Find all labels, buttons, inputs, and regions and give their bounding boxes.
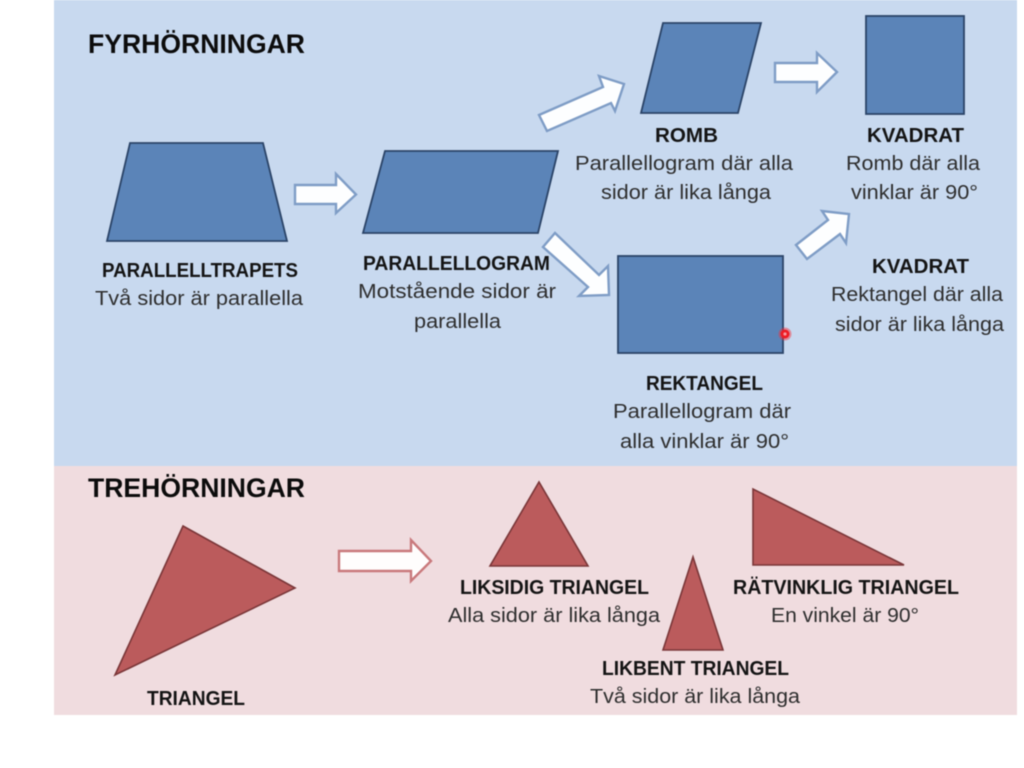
panel: trehörningar [54, 466, 1017, 715]
text: liksidig triangel [448, 577, 661, 627]
arrow: romb to kvadrat [775, 53, 837, 92]
text: kvadrat från rektangel: Rektangel där alla [831, 283, 1004, 306]
arrow: parallelltrapets to parallellogram [295, 174, 356, 213]
text: rektangel: REKTANGEL [646, 373, 763, 395]
text: kvadrat från romb [846, 125, 981, 204]
text: kvadrat från romb: vinklar är 90° [851, 181, 978, 204]
shape: rätvinklig triangel [753, 489, 904, 565]
text: kvadrat från rektangel [831, 256, 1005, 336]
text: kvadrat från romb: Romb där alla [846, 152, 981, 175]
text: romb: ROMB [655, 125, 718, 147]
text: liksidig triangel: Alla sidor är lika långa [448, 604, 661, 627]
text: rätvinklig triangel [733, 576, 959, 627]
shape: parallellogram [363, 151, 558, 233]
text: romb: Parallellogram där alla [575, 152, 794, 175]
arrow: parallellogram to romb [539, 76, 624, 131]
text: romb [575, 125, 794, 204]
cursor dot [778, 328, 792, 340]
arrow: rektangel to kvadrat [796, 211, 849, 259]
text: romb: sidor är lika långa [601, 181, 772, 204]
text: parallelltrapets [95, 260, 304, 310]
text: parallellogram: parallella [414, 310, 502, 333]
text: parallellogram: Motstående sidor är [358, 280, 556, 303]
text: rektangel: alla vinklar är 90° [620, 430, 789, 453]
text: liksidig triangel: LIKSIDIG TRIANGEL [460, 577, 649, 599]
text: rektangel [613, 373, 791, 453]
heading: fyrhörningar: FYRHÖRNINGAR [88, 29, 305, 59]
shape: likbent triangel [663, 557, 723, 650]
text: parallellogram [358, 253, 556, 333]
shape: parallelltrapets [107, 143, 287, 241]
text: rektangel: Parallellogram där [613, 400, 791, 423]
shape: triangel [115, 526, 295, 675]
arrow: triangel to typer [339, 540, 431, 581]
shape: kvadrat [866, 16, 964, 114]
shape: romb [641, 23, 761, 113]
panel: fyrhörningar [54, 0, 1017, 466]
text: rätvinklig triangel: En vinkel är 90° [771, 604, 919, 627]
text: kvadrat från rektangel: sidor är lika långa [835, 313, 1005, 336]
arrow: parallellogram to rektangel [543, 233, 609, 296]
shape: liksidig triangel [490, 482, 588, 566]
text: likbent triangel [590, 658, 801, 708]
shape: rektangel [618, 256, 783, 353]
text: parallellogram: PARALLELLOGRAM [363, 253, 550, 275]
text: kvadrat från romb: KVADRAT [867, 125, 964, 147]
text: parallelltrapets: PARALLELLTRAPETS [102, 260, 298, 282]
text: kvadrat från rektangel: KVADRAT [872, 256, 969, 278]
heading: trehörningar: TREHÖRNINGAR [88, 473, 305, 503]
text: likbent triangel: LIKBENT TRIANGEL [602, 658, 789, 680]
text: parallelltrapets: Två sidor är parallella [95, 287, 304, 310]
text: rätvinklig triangel: RÄTVINKLIG TRIANGEL [733, 576, 959, 599]
text: likbent triangel: Två sidor är lika långa [590, 685, 801, 708]
text: triangel: TRIANGEL [147, 688, 245, 710]
